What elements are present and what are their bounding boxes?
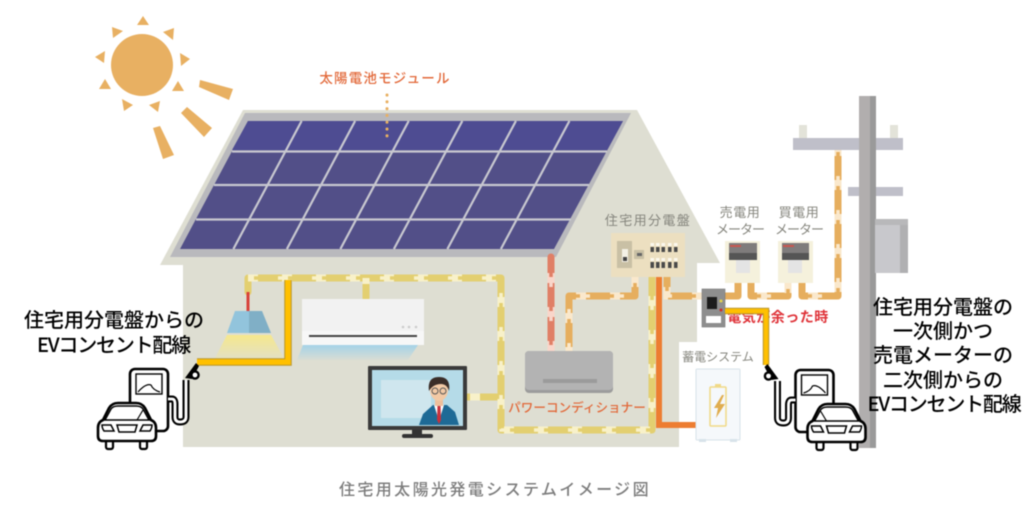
wire: battery connection: [659, 277, 696, 425]
callout: left EV wiring: EVコンセント配線: [37, 329, 191, 358]
label: sell meter: [716, 205, 764, 237]
icon: television with presenter: [368, 366, 467, 438]
callout: right EV wiring: 住宅用分電盤の: [873, 291, 1013, 320]
caption: 住宅用太陽光発電システムイメージ図: [339, 481, 651, 499]
callout: right EV wiring: 売電メーターの: [873, 339, 1013, 368]
label: surplus electricity: 電気が余った時: [727, 309, 829, 325]
callout: right EV wiring: 二次側からの: [883, 364, 1003, 393]
label: sell meter: メーター: [716, 222, 764, 237]
callout: right EV wiring: [867, 291, 1022, 417]
label: sell meter: 売電用: [720, 205, 760, 220]
label: storage system: 蓄電システム: [682, 350, 754, 364]
label: distribution board: 住宅用分電盤: [605, 213, 691, 228]
icon: sun: [95, 16, 233, 159]
panel: solar roof array: [170, 113, 631, 257]
label: solar module: 太陽電池モジュール: [319, 70, 451, 86]
icon: right EV charger and car: [764, 364, 866, 450]
callout: right EV wiring: 一次側かつ: [893, 315, 993, 344]
wire: EV circuit from distribution board: [197, 280, 288, 362]
wire: orange tan supply lines: [569, 146, 838, 351]
callout: left EV wiring: [24, 304, 204, 358]
icon: utility pole: [793, 96, 908, 448]
callout: left EV wiring: 住宅用分電盤からの: [24, 304, 204, 333]
icon: left EV charger and car: [98, 363, 199, 449]
icon: buy meter: [778, 241, 813, 283]
icon: EV breaker box: [702, 289, 725, 327]
wire: DC from solar panel to power conditioner: [548, 257, 554, 351]
label: buy meter: メーター: [775, 222, 823, 237]
wire: EV circuit from meter side: [725, 311, 766, 365]
panel: house body: [160, 110, 720, 447]
panel: distribution board: [611, 233, 685, 277]
icon: sell meter: [725, 241, 760, 283]
icon: air conditioner: [297, 299, 424, 360]
label: buy meter: [775, 205, 823, 237]
label: power conditioner: パワーコンディショナー: [508, 400, 646, 415]
callout: right EV wiring: EVコンセント配線: [867, 388, 1022, 417]
icon: light fixture: [214, 311, 285, 360]
wire: yellow house circuit: [248, 277, 652, 430]
label: solar module: [319, 70, 451, 137]
icon: storage battery: [696, 369, 740, 442]
panel: power conditioner: [525, 351, 613, 393]
label: buy meter: 買電用: [779, 205, 819, 220]
